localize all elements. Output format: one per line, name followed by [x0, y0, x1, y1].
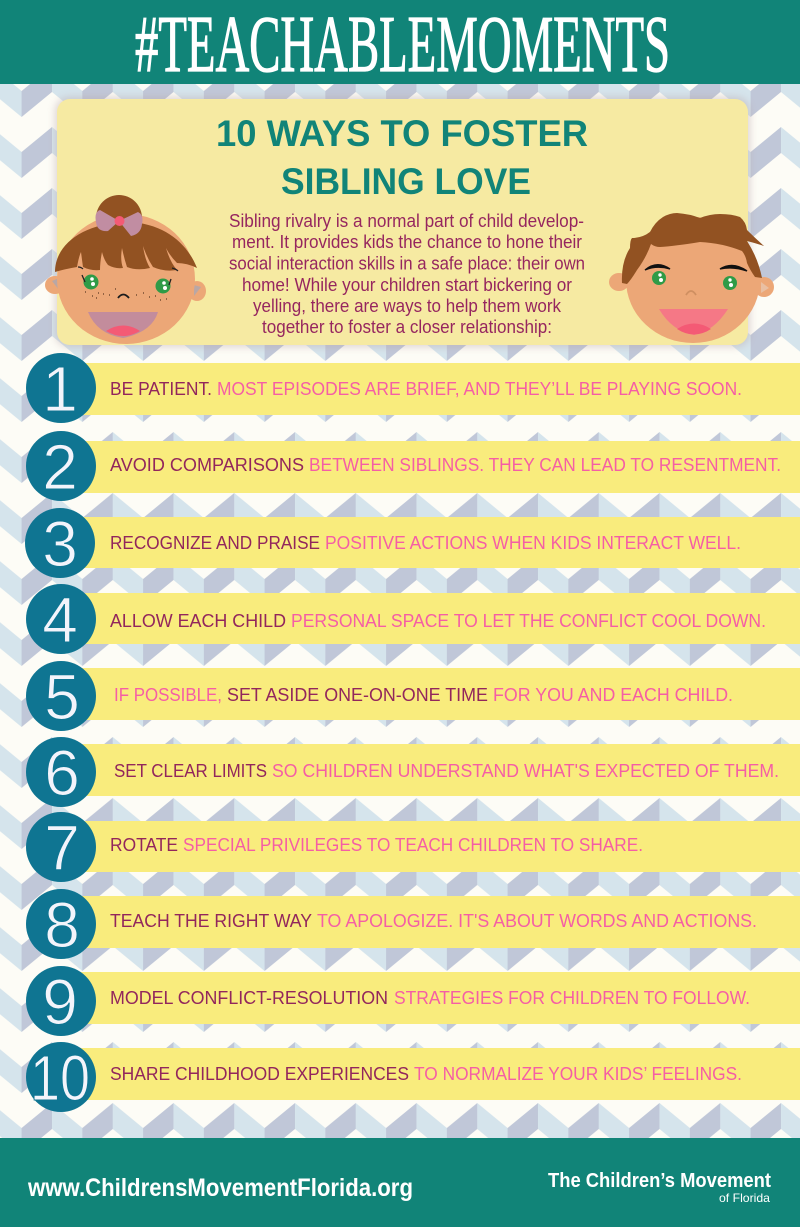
number badge 2: 2 [42, 431, 78, 503]
tip 4 [26, 584, 800, 656]
number badge 3: 3 [42, 508, 78, 580]
tip 6 [26, 737, 800, 809]
number badge 4 [26, 584, 96, 656]
tip text 10 [110, 1064, 742, 1084]
tip text 2: AVOID COMPARISONS [110, 455, 304, 475]
number badge 8 [26, 889, 96, 961]
number badge 9 [26, 966, 96, 1038]
intro text: yelling, there are ways to help them work [253, 296, 562, 316]
tip text 2 [110, 455, 781, 475]
number badge 4: 4 [42, 584, 78, 656]
tip text 6: SO CHILDREN UNDERSTAND WHAT'S EXPECTED OF THEM. [272, 761, 779, 781]
tip text 2: BETWEEN SIBLINGS. THEY CAN LEAD TO RESENTMENT. [309, 455, 781, 475]
tip text 3 [110, 533, 741, 553]
icon: girl face [45, 195, 206, 344]
number badge 10: 10 [30, 1042, 90, 1114]
number badge 7: 7 [44, 812, 80, 884]
tip 2 [26, 431, 800, 503]
tip text 8: TEACH THE RIGHT WAY [110, 911, 312, 931]
tip 7 [26, 812, 800, 884]
tip text 9: STRATEGIES FOR CHILDREN TO FOLLOW. [394, 988, 750, 1008]
number badge 2 [26, 431, 96, 503]
tip text 3: POSITIVE ACTIONS WHEN KIDS INTERACT WELL. [325, 533, 741, 553]
heading: 10 WAYS TO FOSTER [216, 113, 588, 154]
tip 8 [26, 889, 800, 961]
tip text 9: MODEL CONFLICT-RESOLUTION [110, 988, 388, 1008]
tip text 7: SPECIAL PRIVILEGES TO TEACH CHILDREN TO SHARE. [183, 835, 643, 855]
intro text: social interaction skills in a safe place: their own [229, 254, 585, 274]
number badge 6: 6 [44, 737, 80, 809]
icon: boy face [609, 213, 774, 343]
intro text: ment. It provides kids the chance to hone their [232, 232, 582, 252]
heading: SIBLING LOVE [281, 161, 531, 202]
heading [216, 113, 588, 202]
number badge 8: 8 [44, 889, 80, 961]
tip text 3: RECOGNIZE AND PRAISE [110, 533, 320, 553]
number badge 1 [26, 353, 96, 425]
intro text: home! While your children start bickering or [242, 275, 572, 295]
number badge 5 [26, 661, 96, 733]
tip text 5: IF POSSIBLE, [114, 685, 222, 705]
panel: introduction [55, 97, 750, 347]
logo text [548, 1170, 771, 1205]
logo text: of Florida [719, 1191, 770, 1205]
tip text 5 [114, 685, 733, 705]
number badge 7 [26, 812, 96, 884]
website url: www.ChildrensMovementFlorida.org [27, 1174, 413, 1202]
tip text 4: PERSONAL SPACE TO LET THE CONFLICT COOL DOWN. [291, 611, 766, 631]
tip 5 [26, 661, 800, 733]
header banner [0, 0, 800, 89]
tip text 5: FOR YOU AND EACH CHILD. [493, 685, 733, 705]
tip text 10: TO NORMALIZE YOUR KIDS’ FEELINGS. [414, 1064, 742, 1084]
number badge 9: 9 [42, 966, 78, 1038]
tip 10 [26, 1042, 800, 1114]
footer banner [0, 1138, 800, 1227]
intro text [229, 211, 585, 337]
tip text 9 [110, 988, 750, 1008]
tip text 8: TO APOLOGIZE. IT'S ABOUT WORDS AND ACTIONS. [317, 911, 757, 931]
number badge 6 [26, 737, 96, 809]
intro text: Sibling rivalry is a normal part of child develop- [229, 211, 584, 231]
number badge 1: 1 [42, 353, 78, 425]
intro text: together to foster a closer relationship: [262, 317, 552, 337]
tip text 1: MOST EPISODES ARE BRIEF, AND THEY’LL BE PLAYING SOON. [217, 379, 742, 399]
tip 3 [25, 508, 800, 580]
tip 9 [26, 966, 800, 1038]
tip text 5: SET ASIDE ONE-ON-ONE TIME [227, 685, 488, 705]
tip 1 [26, 353, 800, 425]
number badge 3 [25, 508, 95, 580]
tip text 7: ROTATE [110, 835, 178, 855]
number badge 5: 5 [44, 661, 80, 733]
tip text 6: SET CLEAR LIMITS [114, 761, 267, 781]
tip text 1: BE PATIENT. [110, 379, 212, 399]
tip text 10: SHARE CHILDHOOD EXPERIENCES [110, 1064, 409, 1084]
tip text 4: ALLOW EACH CHILD [110, 611, 286, 631]
tip text 8 [110, 911, 757, 931]
logo text: The Children’s Movement [548, 1170, 771, 1192]
